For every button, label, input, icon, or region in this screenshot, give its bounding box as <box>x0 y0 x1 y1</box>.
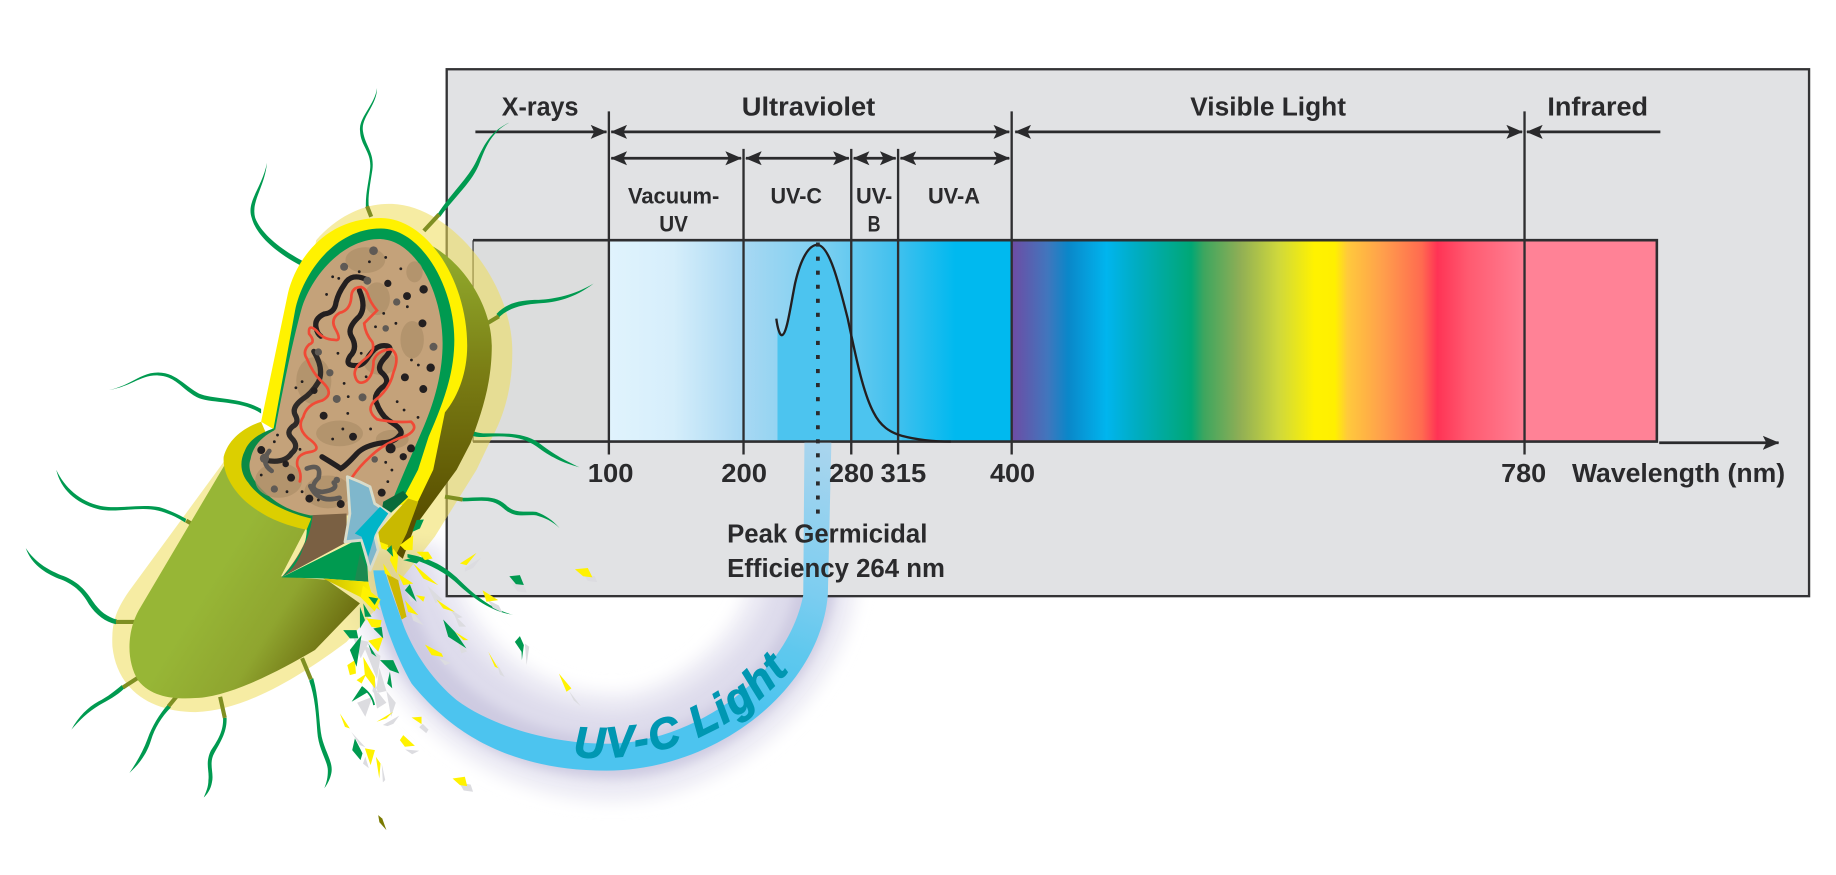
labels: UV sub-bands: UV- <box>856 183 892 208</box>
axis numbers: 780 <box>1501 460 1546 488</box>
yellow debris <box>340 535 592 786</box>
callout: peak germicidal efficiency: Peak Germicidal <box>727 520 927 548</box>
debris shadows <box>351 558 597 792</box>
bacterium capsule halo <box>112 204 512 712</box>
cytoplasm <box>249 239 443 515</box>
headings: band names <box>502 93 1648 121</box>
wound: inner cut <box>282 513 347 577</box>
cytoplasm mottling <box>255 247 424 508</box>
flagella <box>26 88 594 798</box>
labels: UV sub-bands: UV <box>659 211 688 236</box>
axis numbers: 400 <box>990 460 1035 488</box>
wound: dark flap fold <box>355 554 368 582</box>
wound: UV damage region <box>345 477 390 570</box>
spectrum outline and ticks <box>473 111 1657 454</box>
fragments: scattered debris <box>340 519 597 830</box>
infrared segment <box>1525 240 1657 442</box>
callout: peak germicidal efficiency: Efficiency 264 nm <box>727 555 945 583</box>
green debris <box>343 519 524 760</box>
lobe: green edge <box>241 428 328 519</box>
labels: UV sub-bands: Vacuum- <box>628 183 719 208</box>
axis numbers: 200 <box>721 460 767 488</box>
flagella bases through capsule <box>116 206 499 718</box>
wound: green membrane flap <box>282 538 368 582</box>
wound: gold wall piece <box>378 499 418 554</box>
wound: dark green patch <box>382 491 408 515</box>
DNA strands <box>265 277 414 499</box>
labels: UV sub-bands: B <box>868 211 881 236</box>
UV segment <box>609 240 1012 442</box>
labels: UV sub-bands <box>628 183 980 236</box>
spectrum bar <box>473 240 1657 442</box>
lobe: yellow edge <box>224 422 314 530</box>
axis numbers: 280 <box>829 460 874 488</box>
thin green shard <box>362 687 374 705</box>
lower body <box>129 463 360 698</box>
axis numbers: 100 <box>588 460 633 488</box>
axis numbers: Wavelength (nm) <box>1572 460 1785 488</box>
ribosomes: large grey <box>260 246 437 493</box>
wound: green cut edge <box>282 515 313 577</box>
halo around UV-C beam <box>382 515 816 758</box>
labels: UV sub-bands: UV-C <box>770 183 822 208</box>
headings: band names: Visible Light <box>1190 93 1346 121</box>
wound: yellow wedge <box>323 578 380 610</box>
dotted peak line <box>816 243 819 518</box>
beam label: UV-C Light: UV-C Light <box>576 652 788 758</box>
headings: band names: Infrared <box>1547 93 1648 121</box>
labels: UV sub-bands: UV-A <box>928 183 980 208</box>
arrow: wavelength axis <box>1659 442 1779 444</box>
X-ray segment <box>473 240 609 442</box>
wound: gold strip <box>386 573 407 619</box>
axis numbers: 315 <box>881 460 926 488</box>
callout: peak germicidal efficiency <box>727 520 945 583</box>
ribosomes: large dark <box>257 280 435 508</box>
germicidal efficiency curve <box>776 245 951 442</box>
yellow membrane <box>261 218 467 515</box>
wound: teal damage piece <box>355 507 388 557</box>
visible segment <box>1012 240 1525 442</box>
headings: band names: Ultraviolet <box>742 93 876 121</box>
bacterium <box>26 88 594 798</box>
headings: band names: X-rays <box>502 93 578 121</box>
cell wall shaded side <box>392 234 492 559</box>
olive fragment <box>378 815 386 830</box>
arrows: range brackets <box>475 132 1660 158</box>
ribosomes: small dots <box>261 257 418 500</box>
panel: spectrum background <box>447 69 1809 596</box>
germicidal curve fill <box>777 245 902 442</box>
green membrane <box>274 228 454 515</box>
axis numbers <box>588 460 1785 488</box>
UV-C beam <box>373 443 831 771</box>
